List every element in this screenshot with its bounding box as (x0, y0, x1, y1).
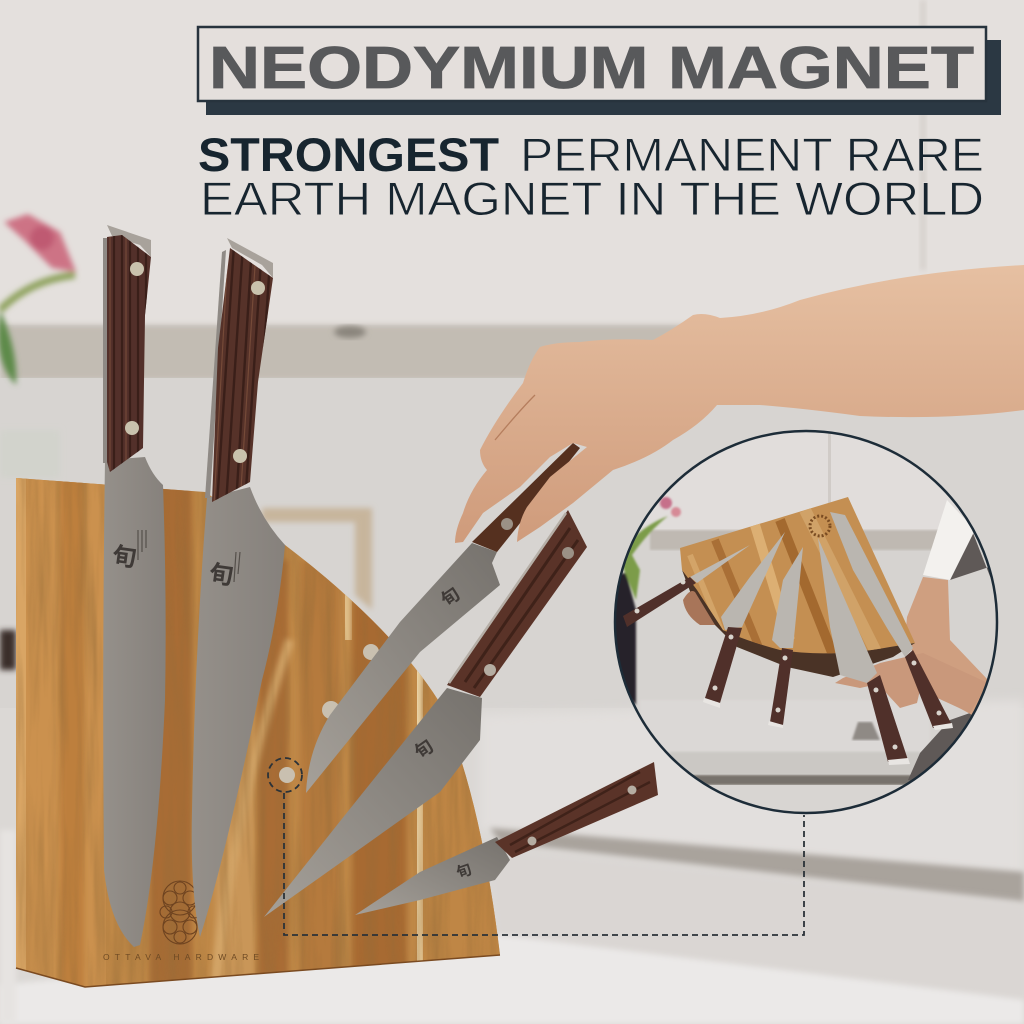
knife 5: paring knife: 旬 (454, 860, 474, 882)
wooden magnetic knife block (16, 470, 506, 1000)
knife 3: slicing knife held by hand (306, 443, 580, 793)
subtitle: EARTH MAGNET IN THE WORLD (200, 172, 984, 225)
inset background (638, 432, 968, 812)
knife 4: chef knife angled: 旬 (411, 736, 437, 763)
engraved mandala logo (160, 881, 200, 944)
subtitle: PERMANENT RARE (520, 128, 984, 181)
inset block (680, 497, 915, 677)
blurred flowers at left (0, 214, 76, 670)
inset knife 5 (830, 512, 953, 730)
knife 2: chef knife: 旬 (207, 560, 235, 590)
inset knife 4 (818, 538, 910, 765)
magnet holes (279, 644, 379, 783)
inset circle outline (615, 431, 997, 813)
knife 4: chef knife angled (264, 510, 587, 917)
title banner: NEODYMIUM MAGNET (209, 35, 974, 101)
circular inset: block held upside down (616, 432, 991, 812)
subtitle (198, 128, 984, 225)
dashed callout: magnet location to inset (268, 758, 804, 935)
title banner (198, 27, 1001, 115)
inset knife 3 (768, 547, 803, 728)
inset knife 1 (623, 545, 750, 627)
inset knife 2 (703, 532, 785, 708)
arm and hand gripping knife (455, 265, 1024, 543)
subtitle: STRONGEST (198, 128, 499, 181)
blurred picture frame behind block (262, 508, 372, 610)
inset flowers and vase (612, 497, 681, 705)
knife 2: chef knife (192, 238, 285, 937)
knife 3: slicing knife held by hand: 旬 (437, 584, 463, 611)
knife 1: tall serrated knife (103, 225, 166, 947)
inset person: apron, sleeve, arm (906, 500, 991, 780)
knife 5: paring knife (355, 762, 658, 915)
engraved brand text: OTTAVA HARDWARE (103, 952, 264, 962)
knife 1: tall serrated knife: 旬 (110, 542, 138, 573)
inset hands (683, 591, 988, 713)
